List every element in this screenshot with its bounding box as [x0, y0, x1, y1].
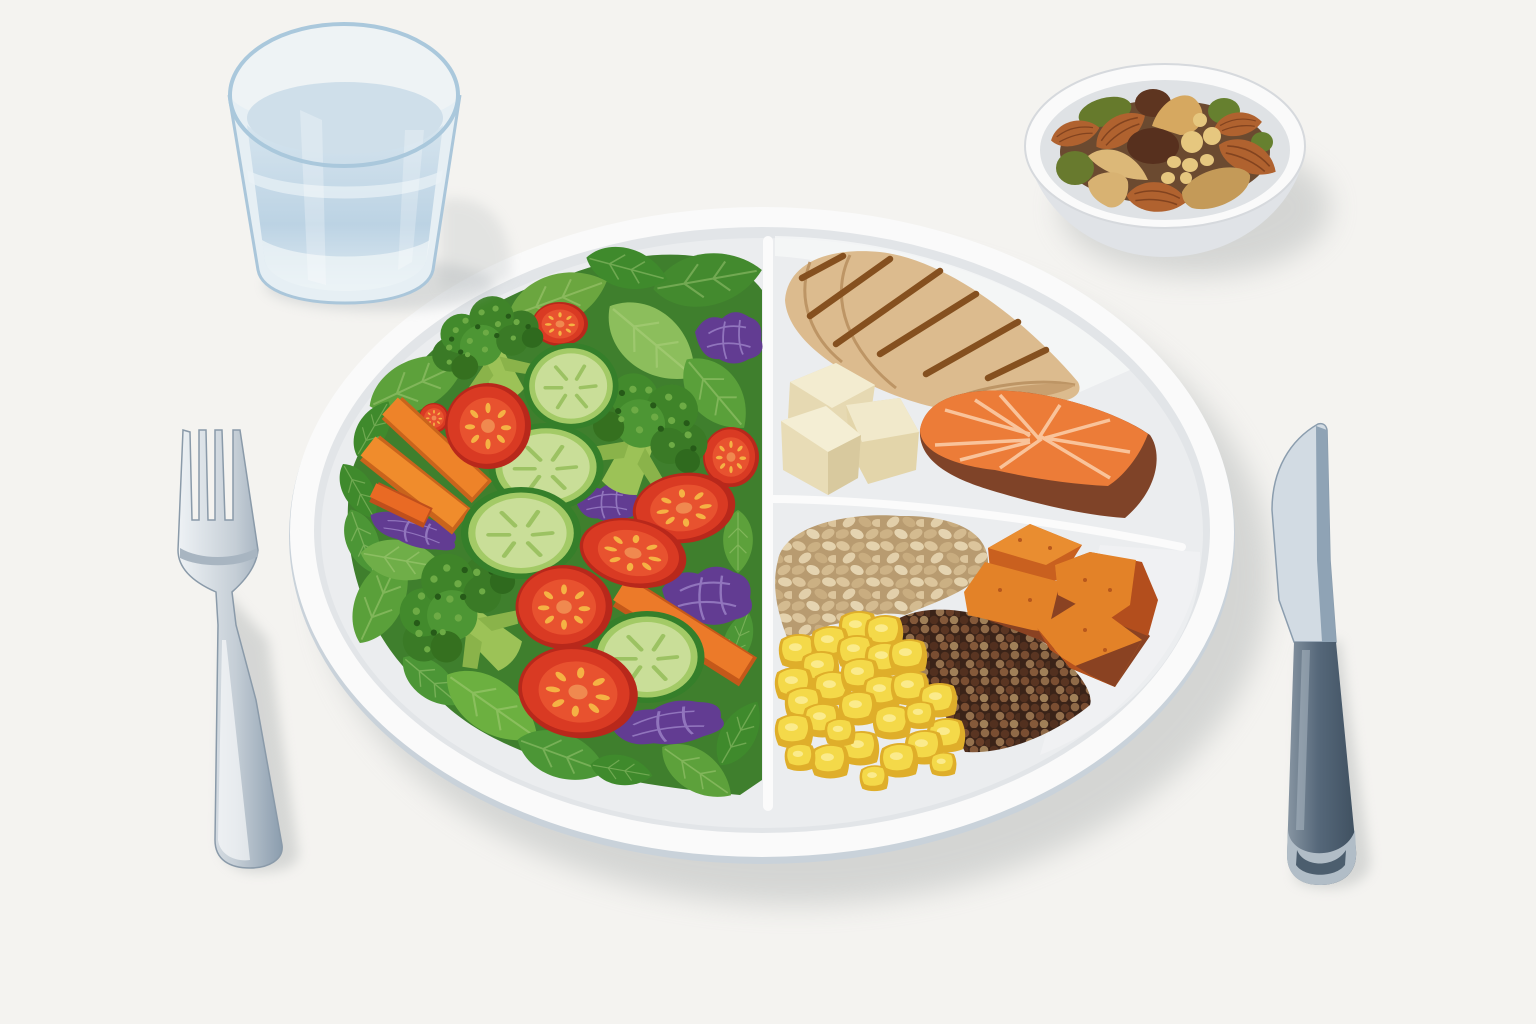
water [247, 125, 443, 291]
salmon [920, 391, 1157, 518]
brown rice [775, 515, 988, 645]
corn kernels [775, 611, 965, 791]
protein section [781, 251, 1157, 518]
small tomatoes [419, 302, 759, 487]
water glass [229, 24, 511, 311]
knife blade [1272, 424, 1336, 642]
plate divider: horizontal [772, 499, 1182, 547]
tomato slices [445, 383, 740, 746]
carrots [368, 406, 748, 672]
salad greens base [330, 239, 772, 811]
grilled chicken [785, 251, 1080, 408]
knife handle [1287, 642, 1356, 885]
mixed nuts [1048, 89, 1283, 216]
grains and starch section [775, 515, 1158, 791]
lettuce leaves [591, 283, 763, 444]
nut bowl [1025, 64, 1330, 276]
salad section [330, 239, 772, 811]
tofu cubes [781, 363, 919, 495]
lentils [896, 610, 1091, 752]
plate divider: vertical [763, 241, 773, 806]
broccoli [373, 282, 726, 709]
knife [1272, 424, 1370, 888]
purple cabbage [366, 312, 762, 753]
sweet potato cubes [964, 524, 1158, 687]
plate [289, 207, 1271, 905]
cucumber slices [461, 343, 704, 703]
fork [178, 430, 298, 872]
